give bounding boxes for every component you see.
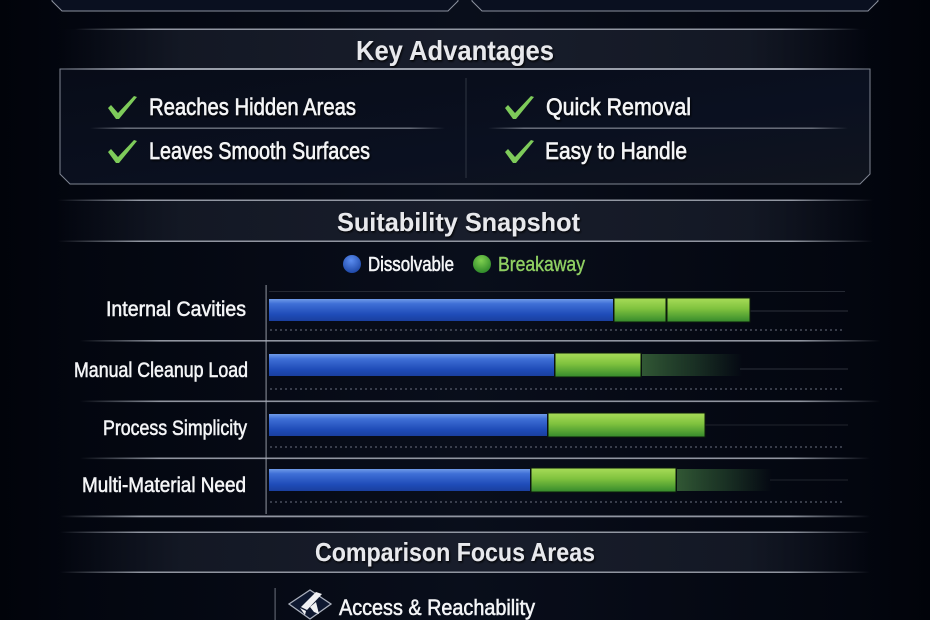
panel: key advantages	[60, 68, 870, 184]
row: internal cavities	[106, 298, 750, 322]
label: process simplicity: Process Simplicity	[103, 417, 247, 440]
heading band: comparison focus areas	[60, 532, 870, 573]
bar chart: suitability	[60, 285, 880, 517]
legend swatch: dissolvable	[343, 255, 361, 273]
text: easy to handle: Easy to Handle	[545, 138, 687, 165]
legend label: dissolvable: Dissolvable	[368, 254, 454, 276]
row: process simplicity	[103, 413, 705, 440]
heading: comparison focus areas: Comparison Focus Areas	[315, 537, 595, 567]
panel: top right fragment	[472, 0, 878, 11]
label: multi-material need: Multi-Material Need	[82, 474, 246, 497]
legend label: breakaway: Breakaway	[498, 254, 585, 276]
icon: check leaves smooth surfaces	[108, 140, 137, 163]
heading: suitability snapshot: Suitability Snapshot	[337, 207, 580, 237]
label: internal cavities: Internal Cavities	[106, 298, 246, 321]
icon: check easy to handle	[505, 140, 534, 163]
text: leaves smooth surfaces: Leaves Smooth Surfaces	[149, 138, 370, 165]
row: manual cleanup load	[74, 353, 742, 382]
icon: access diamond	[289, 590, 331, 619]
heading band: suitability snapshot	[58, 200, 873, 242]
label: manual cleanup load: Manual Cleanup Load	[74, 359, 248, 382]
focus row: access and reachability	[274, 588, 535, 620]
text: access and reachability: Access & Reachability	[339, 595, 535, 620]
text: reaches hidden areas: Reaches Hidden Areas	[149, 94, 356, 121]
panel: top left fragment	[52, 0, 458, 11]
heading band: key advantages	[60, 28, 870, 69]
icon: check reaches hidden areas	[108, 96, 137, 119]
chart grid lines	[60, 285, 880, 517]
heading: key advantages: Key Advantages	[356, 35, 554, 66]
text: quick removal: Quick Removal	[546, 94, 691, 121]
row: multi-material need	[82, 468, 772, 497]
legend swatch: breakaway	[473, 255, 491, 273]
legend	[343, 254, 585, 276]
icon: check quick removal	[505, 96, 534, 119]
